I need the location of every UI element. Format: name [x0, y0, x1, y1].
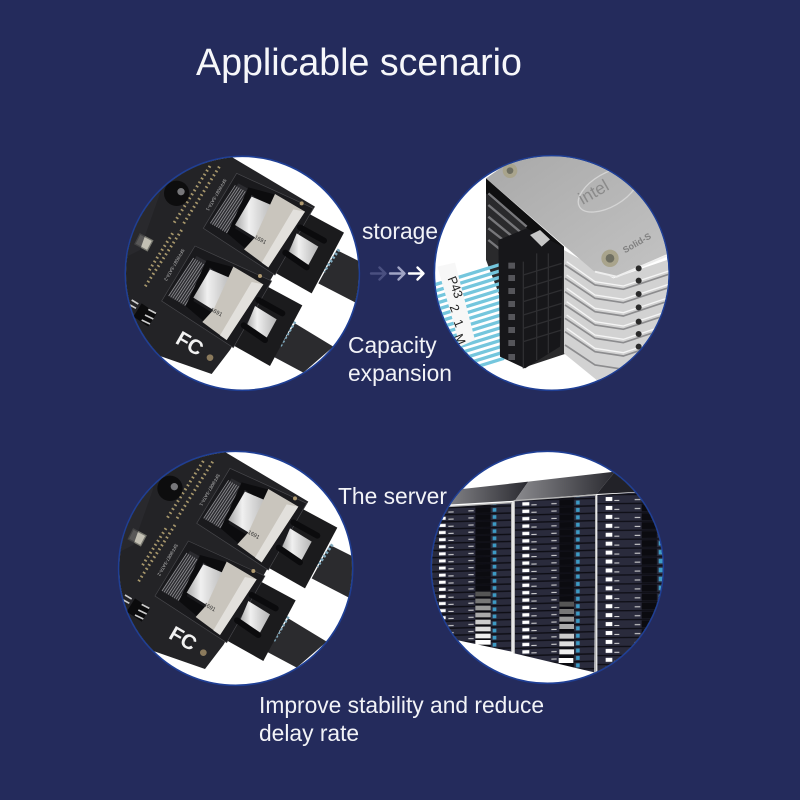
photo: SATA adapter board (top)	[120, 150, 363, 390]
photo: SATA adapter board (bottom): SFF8087-SATA-2	[156, 543, 179, 577]
photo: SATA adapter board (bottom): 1691	[246, 530, 260, 541]
photo: stacked SSD storage: intel	[575, 175, 612, 208]
photo: stacked SSD storage: Solid-S	[621, 231, 653, 255]
photo: SATA adapter board (bottom): SFF8087-SATA-1	[198, 473, 221, 507]
caption: improve stability: Improve stability and reduce	[259, 692, 544, 718]
photo: SATA adapter board (top): SFF8087-SATA-1	[205, 178, 227, 212]
arrows: direction	[371, 268, 424, 280]
photo: stacked SSD storage	[434, 150, 677, 390]
photo: SATA adapter board (top): FC	[172, 327, 207, 361]
photo: SATA adapter board (top): SFF8087-SATA-2	[163, 248, 185, 282]
photo: stacked SSD storage: 1	[451, 318, 466, 329]
photo: server racks	[420, 451, 677, 683]
photo: stacked SSD storage: 3	[450, 289, 466, 300]
photo: SATA adapter board (bottom): FC	[165, 622, 201, 656]
photo: SATA adapter board (top): 1691	[253, 235, 267, 246]
photo: SATA adapter board (bottom)	[113, 445, 357, 685]
title: Applicable scenario	[196, 41, 522, 83]
caption: improve stability: delay rate	[259, 720, 359, 746]
label: the server: The server	[338, 483, 447, 509]
label: capacity expansion: Capacity	[348, 332, 437, 358]
photo: SATA adapter board (bottom): 1691	[202, 602, 216, 613]
label: storage: storage	[362, 218, 438, 244]
photo: SATA adapter board (top): 1691	[209, 307, 223, 318]
photo: stacked SSD storage: M	[451, 332, 468, 347]
photo: stacked SSD storage: P4	[445, 274, 463, 294]
photo: stacked SSD storage: 2	[447, 303, 462, 314]
label: capacity expansion: expansion	[348, 360, 452, 386]
